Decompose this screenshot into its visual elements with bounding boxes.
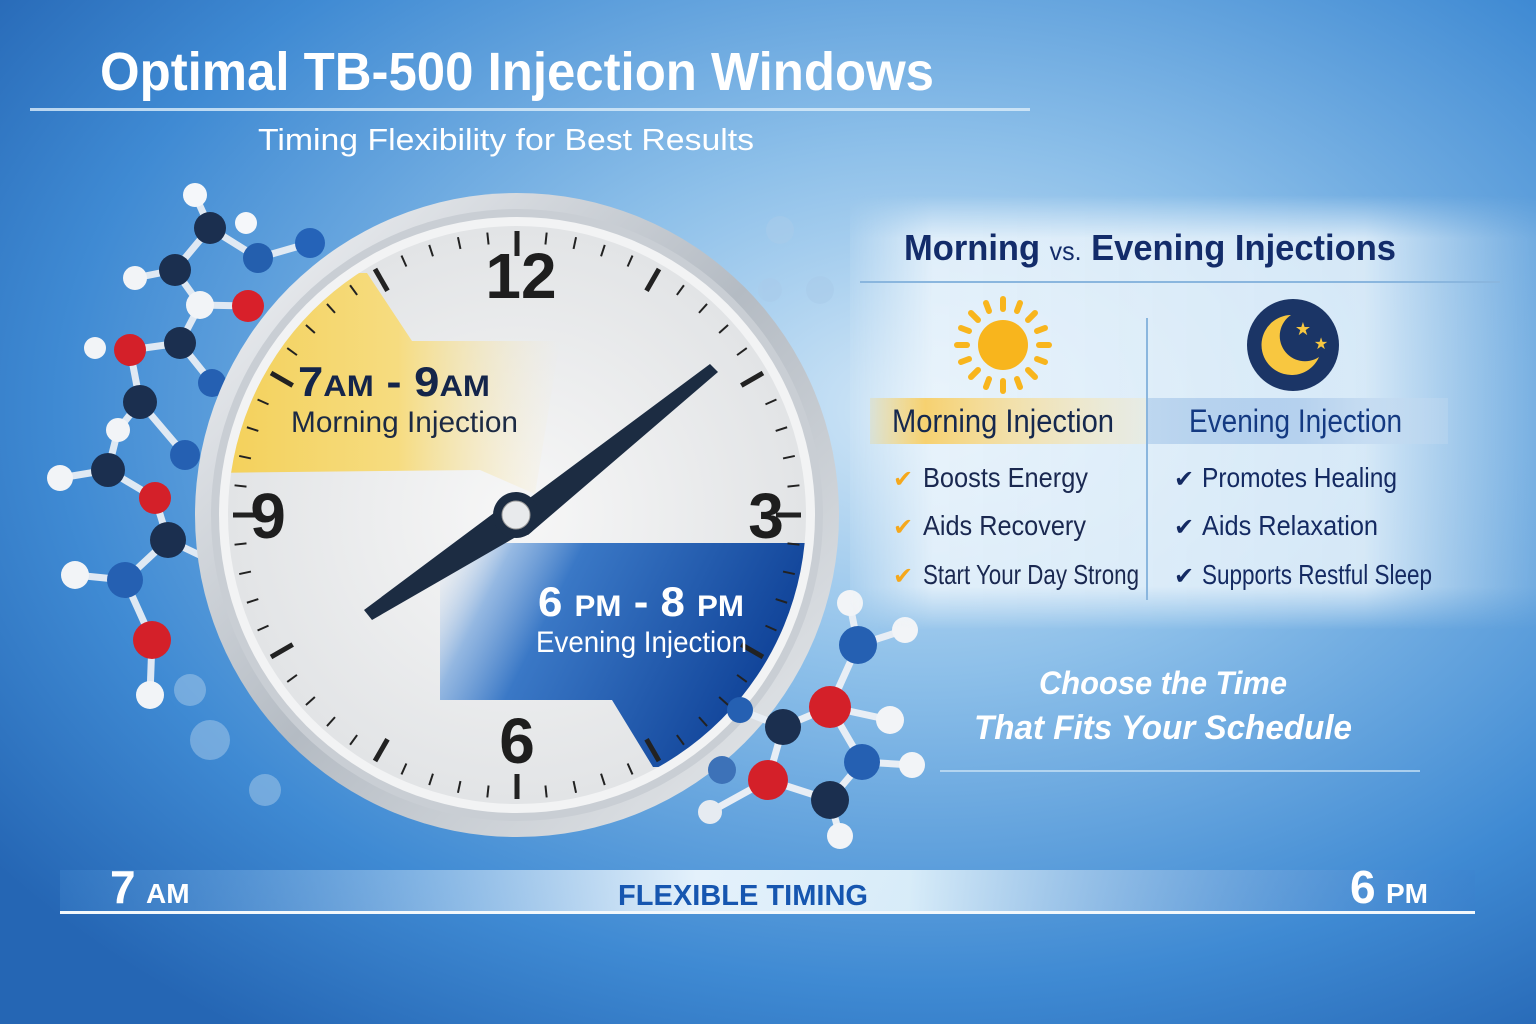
morning list: Aids Recovery: [923, 510, 1086, 541]
title: Optimal TB-500 Injection Windows: [100, 42, 934, 102]
icon: moon: ★: [1314, 336, 1328, 353]
icon: sun: [957, 299, 1049, 391]
evening list: Aids Relaxation: [1202, 510, 1378, 541]
tick marks: [235, 231, 799, 797]
panel: morning vs evening: [850, 195, 1536, 630]
callout: choose the time: [940, 665, 1420, 772]
morning highlight: [231, 273, 538, 494]
evening header: Evening Injection: [1189, 403, 1402, 439]
evening label: [536, 578, 747, 659]
numbers: 12: [485, 240, 557, 312]
evening list: Supports Restful Sleep: [1202, 559, 1432, 590]
subtitle: Timing Flexibility for Best Results: [258, 122, 754, 157]
timeline bar: 7: [110, 861, 136, 913]
morning label: [291, 358, 518, 439]
timeline bar: PM: [1386, 878, 1428, 909]
morning header: [870, 398, 1146, 444]
morning header: Morning Injection: [892, 403, 1114, 439]
evening label: 6 PM - 8 PM: [538, 578, 744, 625]
hands: [364, 364, 718, 620]
numbers: 9: [250, 480, 286, 552]
panel heading: Morning vs. Evening Injections: [904, 227, 1396, 268]
clock: [195, 193, 839, 837]
molecules: background faint: [174, 216, 834, 806]
numbers: 6: [499, 705, 535, 777]
evening list: [1174, 462, 1432, 590]
morning list: ✔: [893, 514, 913, 541]
callout: choose the time: That Fits Your Schedule: [974, 709, 1352, 747]
evening list: Promotes Healing: [1202, 462, 1397, 493]
morning list: ✔: [893, 466, 913, 493]
evening highlight: [440, 543, 820, 767]
evening label: Evening Injection: [536, 626, 747, 659]
icon: moon: ★: [1295, 319, 1311, 339]
morning list: ✔: [893, 563, 913, 590]
morning label: 7AM - 9AM: [298, 358, 490, 405]
callout: choose the time: Choose the Time: [1039, 665, 1287, 701]
timeline bar: AM: [146, 878, 190, 909]
evening list: ✔: [1174, 514, 1194, 541]
morning list: Start Your Day Strong: [923, 559, 1139, 590]
evening header: [1148, 398, 1448, 444]
molecules: bottom right: [710, 605, 912, 836]
numbers: 3: [748, 480, 784, 552]
evening list: ✔: [1174, 466, 1194, 493]
numbers: [250, 240, 784, 777]
timeline bar: [60, 861, 1475, 914]
morning list: [893, 462, 1139, 590]
molecules: left: [60, 195, 310, 695]
evening list: ✔: [1174, 563, 1194, 590]
timeline bar: 6: [1350, 861, 1376, 913]
icon: moon: [1247, 299, 1339, 391]
morning label: Morning Injection: [291, 406, 518, 439]
timeline bar: FLEXIBLE TIMING: [618, 880, 868, 912]
morning list: Boosts Energy: [923, 462, 1088, 493]
